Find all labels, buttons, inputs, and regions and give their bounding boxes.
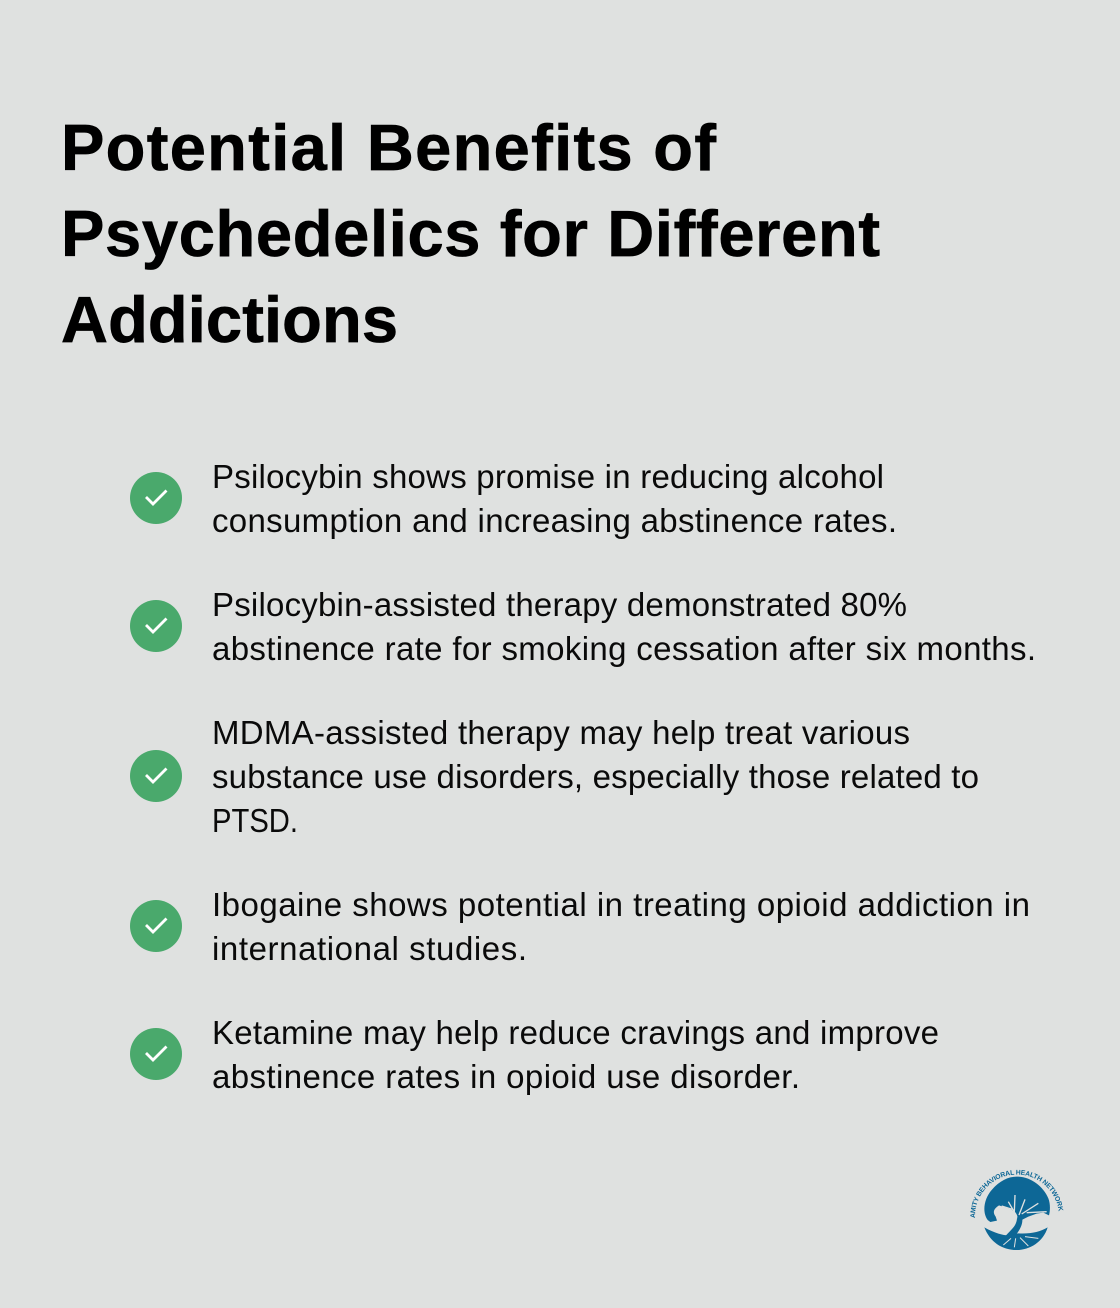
icon: check 1 (130, 472, 182, 524)
logo arc text: AMITY BEHAVIORAL HEALTH NETWORK (970, 1170, 1064, 1218)
text: item 5: Ketamine may help reduce cravings and improve (212, 1014, 939, 1051)
text: item 2: Psilocybin-assisted therapy demonstrated 80% (212, 586, 907, 623)
icon: check 2 (130, 600, 182, 652)
icon: check 3 (130, 750, 182, 802)
text: item 1 (212, 458, 897, 539)
icon: check 5 (130, 1028, 182, 1080)
logo: Amity Behavioral Health Network (970, 1170, 1064, 1250)
icon: check 4 (130, 900, 182, 952)
text: item 4: international studies. (212, 930, 527, 967)
title (61, 111, 880, 356)
title: Addictions (61, 283, 398, 356)
list item 3: MDMA (130, 714, 979, 839)
text: item 1: Psilocybin shows promise in reducing alcohol (212, 458, 884, 495)
text: item 1: consumption and increasing abstinence rates. (212, 502, 897, 539)
text: item 3: substance use disorders, especially those related to (212, 758, 979, 795)
text: item 3: MDMA-assisted therapy may help treat various (212, 714, 910, 751)
list item 1: psilocybin and alcohol (130, 458, 897, 539)
text: item 3 (212, 714, 979, 839)
text: item 4: Ibogaine shows potential in treating opioid addiction in (212, 886, 1030, 923)
text: item 4 (212, 886, 1030, 967)
list item 2: smoking cessation (130, 586, 1036, 667)
text: item 5: abstinence rates in opioid use disorder. (212, 1058, 800, 1095)
list item 5: ketamine (130, 1014, 939, 1095)
title: Potential Benefits of (61, 111, 716, 184)
logo tree (984, 1177, 1050, 1250)
list item 4: ibogaine (130, 886, 1030, 967)
text: item 5 (212, 1014, 939, 1095)
title: Psychedelics for Different (61, 197, 880, 270)
text: item 3: PTSD. (212, 802, 298, 839)
text: item 2: abstinence rate for smoking cessation after six months. (212, 630, 1036, 667)
text: item 2 (212, 586, 1036, 667)
